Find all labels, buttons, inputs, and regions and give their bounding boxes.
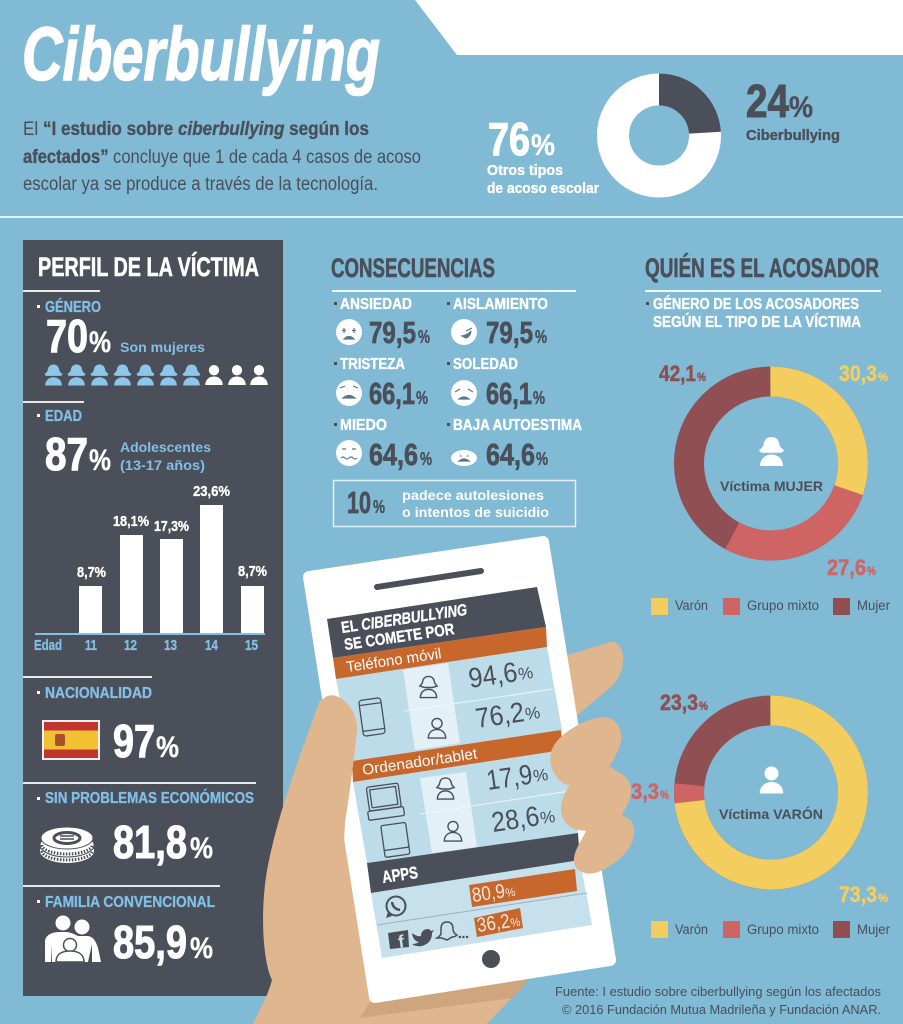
sin problemas económicos: % [190,832,213,865]
tristeza: TRISTEZA [340,356,405,373]
section: teléfono móvil: Teléfono móvil [345,645,443,676]
donut chart: víctima varón: % [878,891,888,905]
edad: (13-17 años) [120,457,205,473]
ansiedad: 79,5 [369,315,416,350]
legend: víctima varón: Grupo mixto [747,922,819,937]
fingers [554,721,630,870]
stat: 76% otros tipos: % [531,129,555,162]
edad: % [89,444,111,477]
donut chart: víctima mujer: 42,1 [659,361,696,386]
baja autoestima: BAJA AUTOESTIMA [453,417,582,434]
stat: otras apps: 36,2 [476,910,511,937]
baja autoestima: 64,6 [486,437,535,472]
phone heading: EL CIBERBULLYING [340,602,468,637]
miedo: MIEDO [340,417,387,434]
stats: teléfono móvil: 76,2 [473,696,526,734]
donut chart: víctima mujer: % [867,564,876,578]
intro text: escolar ya se produce a través de la tecnología. [23,174,378,195]
donut chart: víctima varón [631,690,888,907]
sin problemas económicos: 81,8 [113,816,187,868]
soledad [447,356,545,411]
stat: 24% ciberbullying: % [789,91,813,124]
aislamiento: 79,5 [486,315,533,350]
edad: 87 [45,428,88,480]
callout: autolesiones [334,480,576,526]
donut chart: víctima varón: % [660,788,669,802]
panel: perfil de la víctima [23,240,283,996]
stats: teléfono móvil [420,656,541,738]
legend: víctima varón [651,921,890,938]
subheading: género de los acosadores [646,294,861,331]
stats: teléfono móvil: % [517,663,534,684]
stat: 76% otros tipos: Otros tipos [487,162,563,179]
donut chart: víctima varón: % [699,699,708,713]
bar chart: edad: 17,3% [154,518,189,535]
bar chart: edad: 8,7% [238,563,267,580]
familia convencional: % [190,932,213,965]
familia convencional: 85,9 [113,916,187,968]
donut chart: 24% ciberbullying [613,90,705,182]
donut chart: víctima mujer: 30,3 [839,361,877,386]
donut chart: víctima mujer: % [878,370,888,384]
donut chart: víctima varón: 23,3 [660,690,698,715]
stats: ordenador/tablet: % [532,765,549,786]
soledad: SOLEDAD [453,356,518,373]
section: apps: APPS [381,863,419,887]
soledad: % [533,388,545,408]
panel: consecuencias [331,253,582,526]
tristeza: % [416,388,428,408]
stats: ordenador/tablet: 28,6 [489,800,541,838]
stat: 24% ciberbullying: 24 [746,75,789,127]
baja autoestima: % [536,449,548,469]
phone heading [340,602,468,654]
donut chart: víctima varón: 73,3 [839,882,877,907]
hand palm and back finger [253,642,623,1024]
icon: portátil y tablet [364,783,410,859]
género: GÉNERO [45,297,101,316]
illustration: hand holding phone [253,542,630,1024]
callout: autolesiones: padece autolesiones [402,487,544,503]
callout: autolesiones: % [373,497,385,517]
nacionalidad [37,685,179,767]
stats: teléfono móvil: 94,6 [466,656,519,694]
stat: whatsapp: % [504,885,517,900]
pictogram: 7 de 10 mujeres [45,364,268,386]
icon: teléfono [359,698,385,736]
stat: whatsapp: 80,9 [471,880,506,907]
bar chart: edad: 11 [85,637,97,654]
legend: víctima mujer: Varón [675,598,708,613]
donut chart: víctima varón: Víctima VARÓN [719,805,823,822]
intro text [23,119,421,195]
ansiedad: ANSIEDAD [340,296,412,313]
donut chart: víctima varón: 3,3 [631,779,659,804]
icon: redes sociales: ... [458,926,469,941]
white corner shape [415,0,903,55]
donut chart: víctima mujer: Víctima MUJER [720,478,823,494]
bar chart: edad: 12 [124,637,137,654]
ansiedad [334,296,430,350]
miedo [334,417,432,472]
callout: autolesiones: 10 [347,485,371,520]
thumb [300,695,357,860]
bar chart: edad: 13 [164,637,177,654]
aislamiento: % [535,327,547,347]
género: % [89,326,111,359]
bar chart: edad: Edad [34,637,62,654]
subheading: género de los acosadores: SEGÚN EL TIPO DE LA VÍCTIMA [653,312,861,331]
donut chart: víctima mujer: 27,6 [827,555,866,580]
stat: 24% ciberbullying [746,75,840,144]
intro text: El “I estudio sobre ciberbullying según los [23,119,369,140]
bar chart: edad: 15 [245,637,258,654]
bar chart: edad [34,483,267,654]
icon: monedas [40,827,94,863]
tristeza: 66,1 [369,376,415,411]
stat: 76% otros tipos: de acoso escolar [487,180,599,197]
familia convencional [37,894,215,968]
source credit: Fuente: I estudio sobre ciberbullying según los afectados [555,984,881,999]
donut chart: víctima mujer [659,361,888,580]
tristeza [334,356,428,411]
icon: familia [45,916,101,962]
icon: redes sociales [388,922,469,952]
legend: víctima varón: Mujer [857,922,890,937]
bar chart: edad: 23,6% [193,483,230,500]
género: Son mujeres [120,339,205,355]
source credit [555,984,881,1017]
stats: teléfono móvil: % [524,703,541,724]
stat: 76% otros tipos [487,113,599,197]
section: ordenador/tablet: Ordenador/tablet [361,745,479,779]
ansiedad: % [418,327,430,347]
aislamiento: AISLAMIENTO [453,296,548,313]
title: Ciberbullying [22,12,380,96]
miedo: % [420,449,432,469]
stat: otras apps: % [509,915,522,930]
bar chart: edad: 18,1% [113,513,149,530]
legend: víctima mujer: Mujer [857,598,890,613]
intro text: afectados” concluye que 1 de cada 4 casos de acoso [23,147,421,168]
miedo: 64,6 [369,437,418,472]
bar chart: edad: 14 [205,637,219,654]
nacionalidad: % [156,731,179,764]
edad [37,408,211,480]
donut chart: víctima mujer: % [697,370,706,384]
stats: ordenador/tablet: % [539,807,556,828]
stat: 76% otros tipos: 76 [488,113,530,165]
source credit: © 2016 Fundación Mutua Madrileña y Fundación ANAR. [562,1002,881,1017]
phone body [309,542,610,997]
género: 70 [46,310,88,362]
icon: redes sociales: f [397,931,406,952]
legend: víctima mujer: Grupo mixto [747,598,819,613]
bar chart: edad: 8,7% [77,564,106,581]
subheading: género de los acosadores: GÉNERO DE LOS ACOSADORES [653,294,859,313]
heading: consecuencias: CONSECUENCIAS [331,253,495,283]
callout: autolesiones: o intentos de suicidio [402,504,549,520]
legend: víctima mujer [651,598,890,615]
panel: quién es el acosador [631,252,890,938]
familia convencional: FAMILIA CONVENCIONAL [45,894,215,911]
stat: 24% ciberbullying: Ciberbullying [746,127,840,144]
nacionalidad: NACIONALIDAD [45,685,152,702]
soledad: 66,1 [486,376,532,411]
heading: perfil de la víctima: PERFIL DE LA VÍCTIMA [38,251,259,282]
sin problemas económicos [37,788,254,868]
phone screen [327,587,592,958]
aislamiento [447,296,548,350]
género [37,297,205,362]
phone heading: SE COMETE POR [343,621,456,654]
icon: whatsapp [386,896,406,918]
legend: víctima varón: Varón [675,922,708,937]
sin problemas económicos: SIN PROBLEMAS ECONÓMICOS [45,788,254,807]
nacionalidad: 97 [113,715,155,767]
baja autoestima [447,417,582,472]
stats: ordenador/tablet: 17,9 [484,759,534,796]
stats: ordenador/tablet [437,759,556,841]
icon: bandera de España [42,720,100,760]
edad: Adolescentes [120,439,211,455]
edad: EDAD [45,408,82,425]
